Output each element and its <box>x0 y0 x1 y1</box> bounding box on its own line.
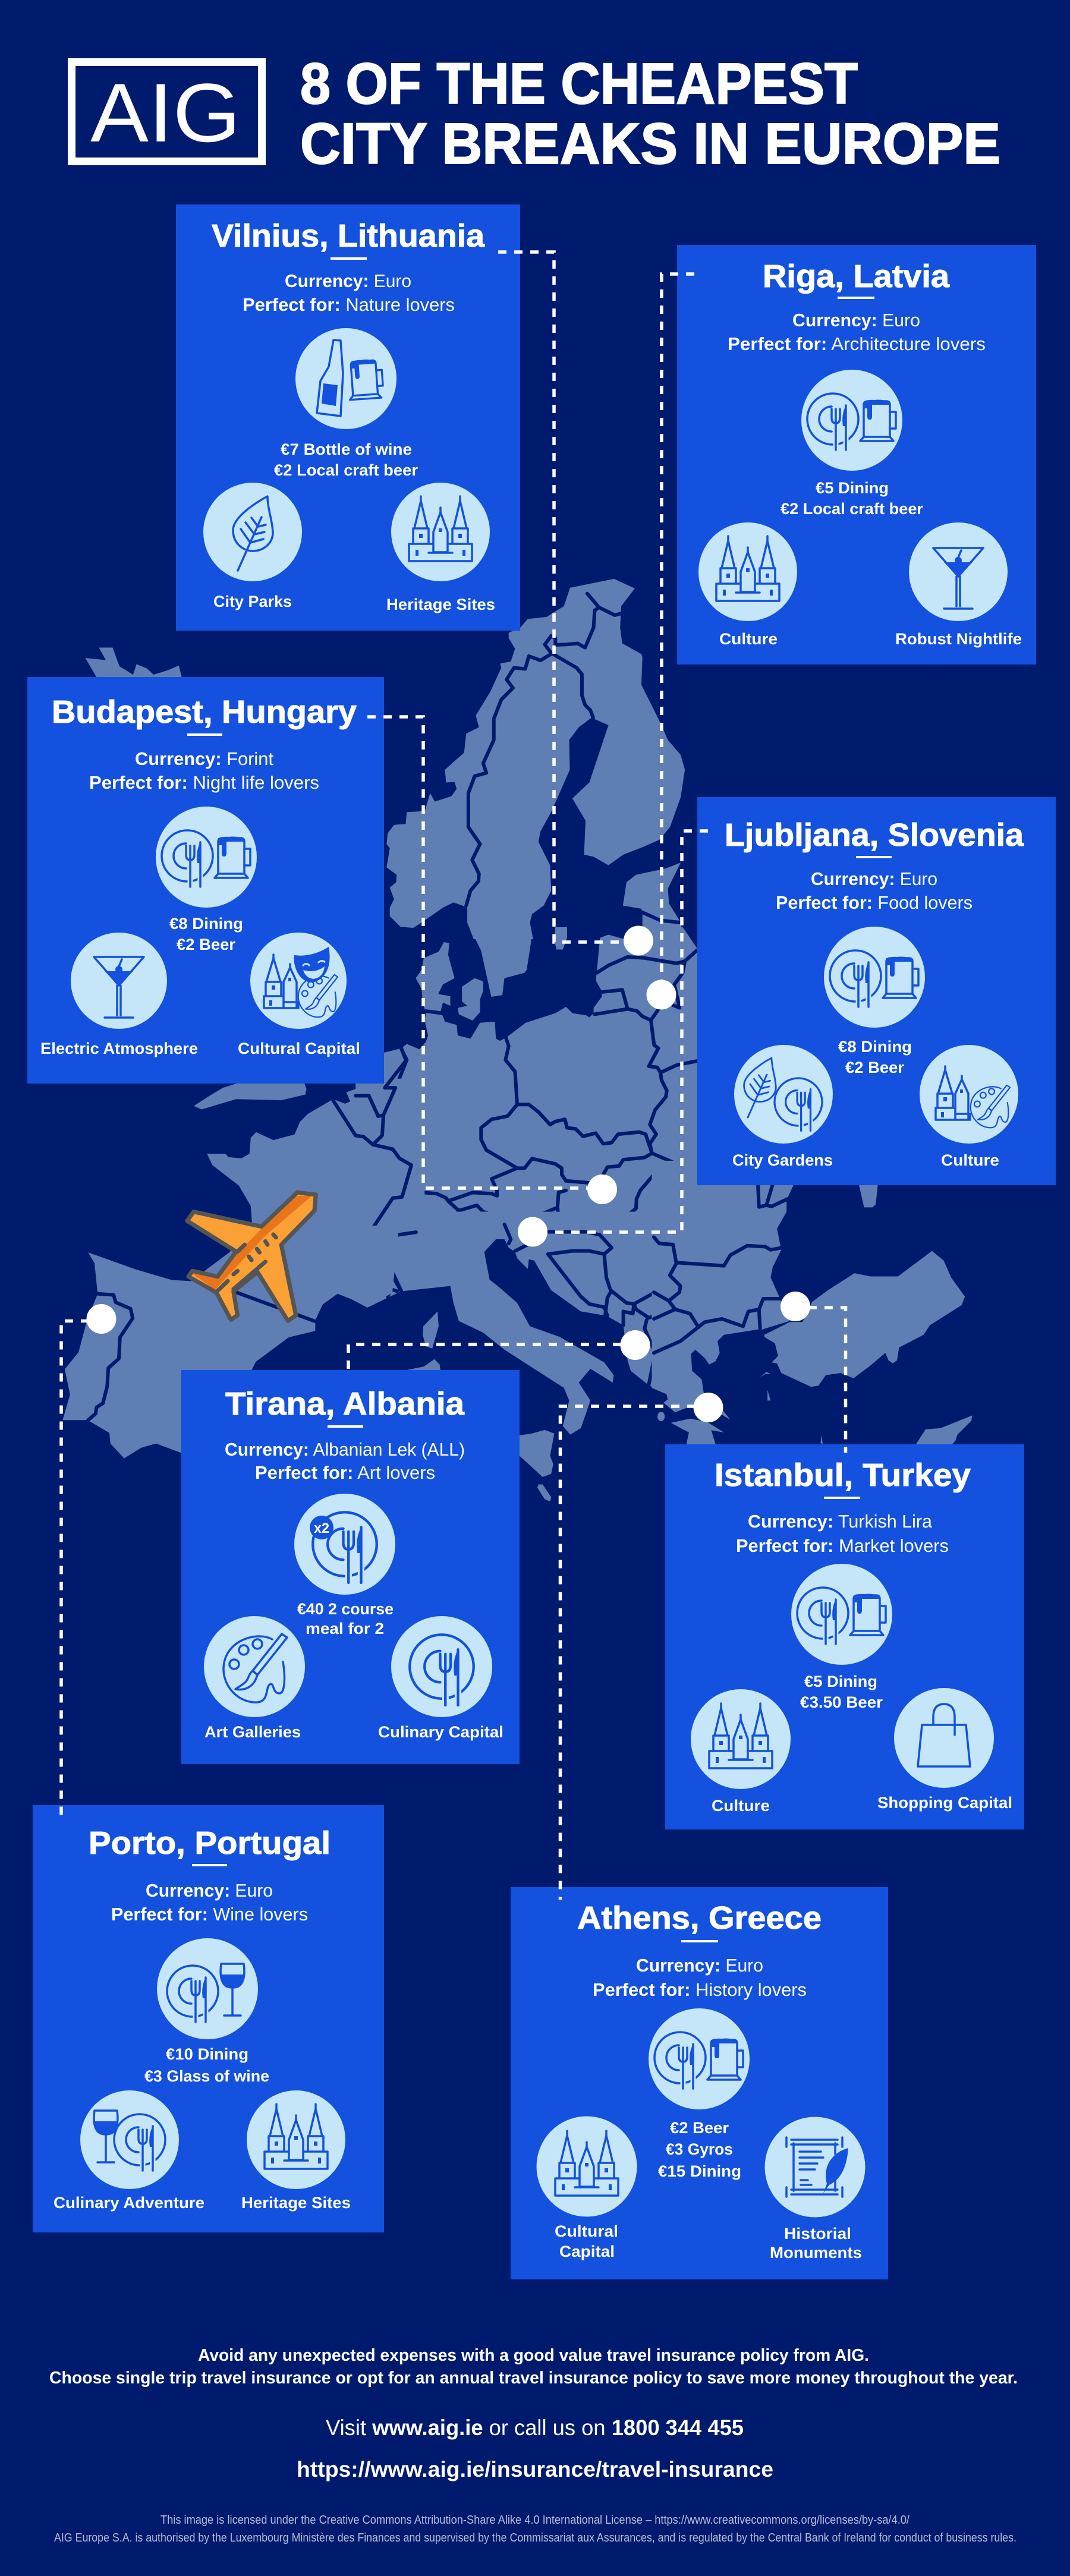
label: Capital: Capital <box>559 2243 615 2260</box>
map of Europe <box>62 579 973 1501</box>
title <box>300 51 1000 176</box>
footer: URL: https://www.aig.ie/insurance/travel-insurance <box>297 2457 773 2481</box>
heading: Porto: Porto, Portugal <box>89 1825 331 1861</box>
price: beer: €3.50 Beer <box>800 1693 883 1711</box>
label: Monuments: Monuments <box>770 2244 862 2262</box>
connector: Tirana <box>348 1344 621 1374</box>
label: Heritage Sites: Heritage Sites <box>386 596 495 613</box>
icon: martini <box>909 522 1008 621</box>
icon: castle <box>698 522 797 621</box>
label: Culinary Capital: Culinary Capital <box>378 1723 503 1741</box>
label: Shopping Capital: Shopping Capital <box>877 1794 1012 1812</box>
perfect for line: Perfect for: Food lovers <box>776 892 973 913</box>
connector: Budapest <box>367 717 588 1188</box>
label: Robust Nightlife: Robust Nightlife <box>895 630 1022 648</box>
heading: Athens: Athens, Greece <box>577 1900 822 1936</box>
perfect for line: Perfect for: History lovers <box>593 1979 807 2000</box>
icon: plate <box>391 1616 492 1717</box>
heading: Istanbul: Istanbul, Turkey <box>715 1457 971 1493</box>
footer: insurance message: Avoid any unexpected expenses with a good value travel insurance policy from AIG. <box>198 2346 869 2365</box>
icon: dining and wine <box>157 1938 258 2039</box>
label: Art Galleries: Art Galleries <box>204 1723 301 1741</box>
footer: legal text: This image is licensed under the Creative Commons Attribution-Share Alike 4.0 International License – https://www.creativecommons.org/licenses/by-sa/4.0/ <box>160 2514 910 2527</box>
price: beer: €2 Beer <box>177 936 235 953</box>
icon: castle <box>391 483 490 581</box>
icon: castle <box>247 2090 345 2189</box>
icon: dining and beer <box>824 927 925 1028</box>
heading: Riga: Riga, Latvia <box>763 259 950 294</box>
footer: insurance message <box>49 2346 1018 2388</box>
currency line: Currency: Euro <box>285 270 411 291</box>
icon: castle and palette <box>920 1045 1018 1144</box>
icon: shopping bag <box>894 1688 994 1788</box>
icon: castle <box>691 1689 791 1789</box>
panel: Budapest <box>27 677 384 1084</box>
icon: dining and beer <box>801 370 902 471</box>
perfect for line: Perfect for: Wine lovers <box>111 1904 308 1925</box>
price: meal line 1: €40 2 course <box>297 1600 394 1618</box>
label: Cultural Capital: Cultural Capital <box>238 1040 360 1057</box>
connector: Porto <box>61 1321 89 1816</box>
price: dining: €15 Dining <box>658 2162 741 2180</box>
heading: Tirana: Tirana, Albania <box>225 1386 465 1422</box>
currency line: Currency: Euro <box>636 1955 763 1976</box>
connector: Athens <box>560 1406 696 1900</box>
price: dining: €8 Dining <box>838 1038 912 1056</box>
connector: Ljubljana <box>544 831 708 1232</box>
currency line: Currency: Turkish Lira <box>748 1511 933 1532</box>
perfect for line: Perfect for: Art lovers <box>255 1462 435 1483</box>
heading: Ljubljana: Ljubljana, Slovenia <box>725 817 1024 853</box>
price: beer: €2 Local craft beer <box>781 500 923 518</box>
panel: Riga <box>677 245 1036 665</box>
perfect for line: Perfect for: Market lovers <box>736 1535 949 1556</box>
price: gyros: €3 Gyros <box>666 2140 733 2158</box>
price: wine: €3 Glass of wine <box>144 2067 269 2085</box>
footer: insurance message: Choose single trip travel insurance or opt for an annual travel insurance policy to save more money throughout the year. <box>49 2369 1018 2388</box>
currency line: Currency: Forint <box>135 748 273 769</box>
icon: leaf <box>203 483 302 581</box>
label: Electric Atmosphere: Electric Atmosphere <box>40 1040 198 1057</box>
connector: Istanbul <box>808 1308 845 1453</box>
price: wine: €7 Bottle of wine <box>281 440 412 458</box>
title: 8 OF THE CHEAPEST <box>300 51 858 116</box>
label: City Gardens: City Gardens <box>732 1151 833 1169</box>
icon: dining and beer <box>649 2008 750 2109</box>
currency line: Currency: Albanian Lek (ALL) <box>225 1439 465 1460</box>
icon: castle <box>536 2116 637 2217</box>
label: Historial: Historial <box>784 2225 851 2243</box>
perfect for line: Perfect for: Night life lovers <box>89 772 319 793</box>
icon: dining and beer <box>791 1564 892 1665</box>
icon: leaf and plate <box>734 1045 833 1144</box>
label: Culture: Culture <box>712 1797 770 1815</box>
heading: Budapest: Budapest, Hungary <box>52 694 357 730</box>
label: Culture: Culture <box>719 630 778 648</box>
icon: martini <box>71 933 167 1029</box>
price: beer: €2 Beer <box>845 1059 904 1076</box>
currency line: Currency: Euro <box>811 868 937 889</box>
panel: Athens <box>511 1887 888 2279</box>
price: dining: €8 Dining <box>169 915 243 933</box>
price: beer: €2 Beer <box>670 2119 729 2137</box>
icon: plate x2: x2 <box>314 1520 329 1536</box>
currency line: Currency: Euro <box>792 310 920 330</box>
icon: dining and beer <box>156 807 257 908</box>
panel: Istanbul <box>665 1444 1024 1829</box>
icon: plate x2 <box>294 1494 395 1595</box>
footer: legal text <box>54 2514 1016 2544</box>
currency line: Currency: Euro <box>146 1880 273 1901</box>
icon: castle, mask and palette <box>250 933 347 1029</box>
title: CITY BREAKS IN EUROPE <box>300 111 1000 176</box>
price: dining: €5 Dining <box>804 1673 877 1690</box>
label: Culture: Culture <box>941 1151 999 1169</box>
panel: Vilnius <box>176 204 520 631</box>
footer: contact line: Visit www.aig.ie or call us on 1800 344 455 <box>326 2416 744 2440</box>
panel: Porto <box>33 1805 384 2232</box>
map location dots <box>87 926 810 1422</box>
price: beer: €2 Local craft beer <box>274 461 418 479</box>
panel: Tirana <box>181 1370 520 1764</box>
perfect for line: Perfect for: Architecture lovers <box>728 333 986 354</box>
price: dining: €5 Dining <box>816 479 889 497</box>
icon: wine and plate <box>80 2090 179 2189</box>
label: Cultural: Cultural <box>555 2222 618 2240</box>
label: Culinary Adventure: Culinary Adventure <box>54 2194 204 2212</box>
price: meal line 2: meal for 2 <box>306 1620 384 1637</box>
price: dining: €10 Dining <box>166 2045 248 2063</box>
logo: AIG: AIG <box>90 66 241 159</box>
icon: bottle and beer <box>295 328 396 429</box>
connector: Riga <box>662 274 694 981</box>
connector: Vilnius <box>498 252 624 942</box>
label: City Parks: City Parks <box>213 593 292 610</box>
panel: Ljubljana <box>697 797 1056 1185</box>
perfect for line: Perfect for: Nature lovers <box>243 294 455 315</box>
heading: Vilnius: Vilnius, Lithuania <box>212 218 485 254</box>
icon: palette <box>204 1616 305 1717</box>
label: Heritage Sites: Heritage Sites <box>241 2194 351 2212</box>
icon: scroll and quill <box>764 2117 866 2217</box>
icon: airplane <box>187 1192 316 1321</box>
